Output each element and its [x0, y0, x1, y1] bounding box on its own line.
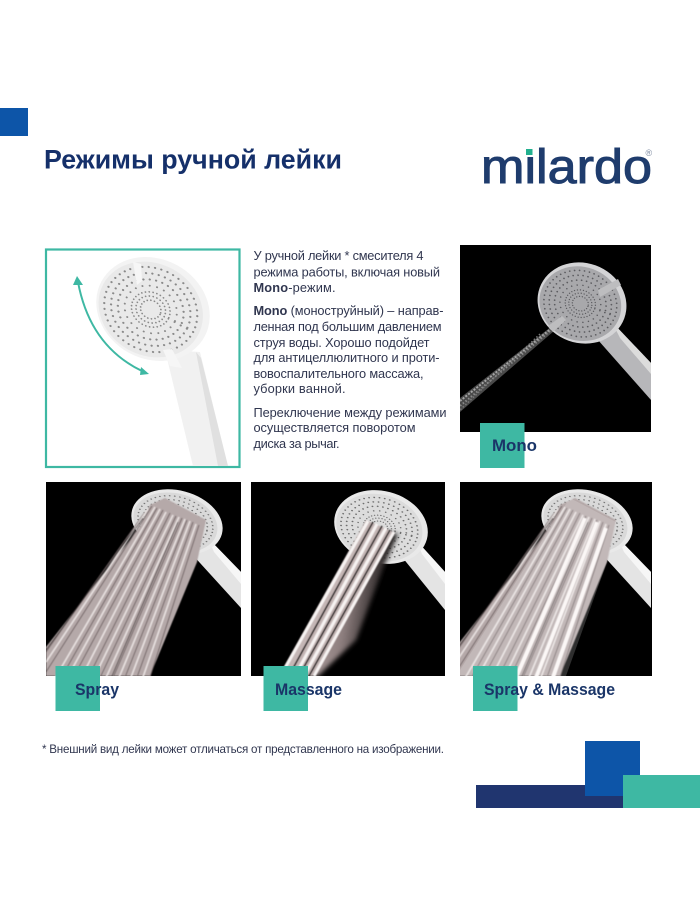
label tile: Massage	[264, 666, 342, 711]
label tile: Spray and Massage: Spray & Massage	[484, 681, 615, 699]
footnote: * Внешний вид лейки может отличаться от представленного на изображении.	[42, 743, 444, 756]
shower head with handle	[96, 257, 228, 466]
panel: Massage photo	[251, 480, 445, 676]
massage water jets	[283, 520, 398, 676]
text block: description: осуществляется поворотом	[254, 420, 416, 435]
text block: description: для антицеллюлитного и проти-	[254, 350, 440, 365]
arrow: rotation direction	[73, 276, 149, 375]
label tile: Spray: Spray	[75, 681, 120, 699]
mono water jet	[460, 326, 554, 412]
logo: milardo: milardo	[481, 141, 652, 194]
label tile: Mono: Mono	[492, 437, 537, 455]
panel: Spray and Massage photo	[456, 480, 652, 680]
panel: shower head rotation diagram	[46, 237, 240, 467]
text block: description: У ручной лейки * смесителя 4	[254, 248, 424, 263]
panel: Spray photo	[46, 480, 241, 680]
panel: Mono photo	[460, 245, 651, 432]
label tile: Spray and Massage	[473, 666, 615, 711]
text block: description: Переключение между режимами	[254, 405, 446, 420]
logo: milardo: ®	[646, 148, 652, 158]
text block: description: вовоспалительного массажа,	[254, 366, 424, 381]
decorative corner blocks	[476, 741, 700, 808]
corner accent square	[0, 108, 28, 136]
text block: description: диска за рычаг.	[254, 436, 340, 451]
text block: description: ленная под большим давлением	[254, 319, 442, 334]
text block: description	[254, 248, 446, 451]
text block: description: струя воды. Хорошо подойдет	[254, 335, 430, 350]
title: Режимы ручной лейки	[44, 144, 342, 174]
text block: description: Mono-режим.	[254, 280, 336, 295]
label tile: Mono	[480, 423, 537, 468]
text block: description: Mono (моноструйный) – направ-	[254, 303, 444, 318]
label tile: Spray	[56, 666, 120, 711]
text block: description: режима работы, включая новый	[254, 264, 440, 280]
label tile: Massage: Massage	[275, 681, 342, 699]
text block: description: уборки ванной.	[254, 381, 346, 396]
